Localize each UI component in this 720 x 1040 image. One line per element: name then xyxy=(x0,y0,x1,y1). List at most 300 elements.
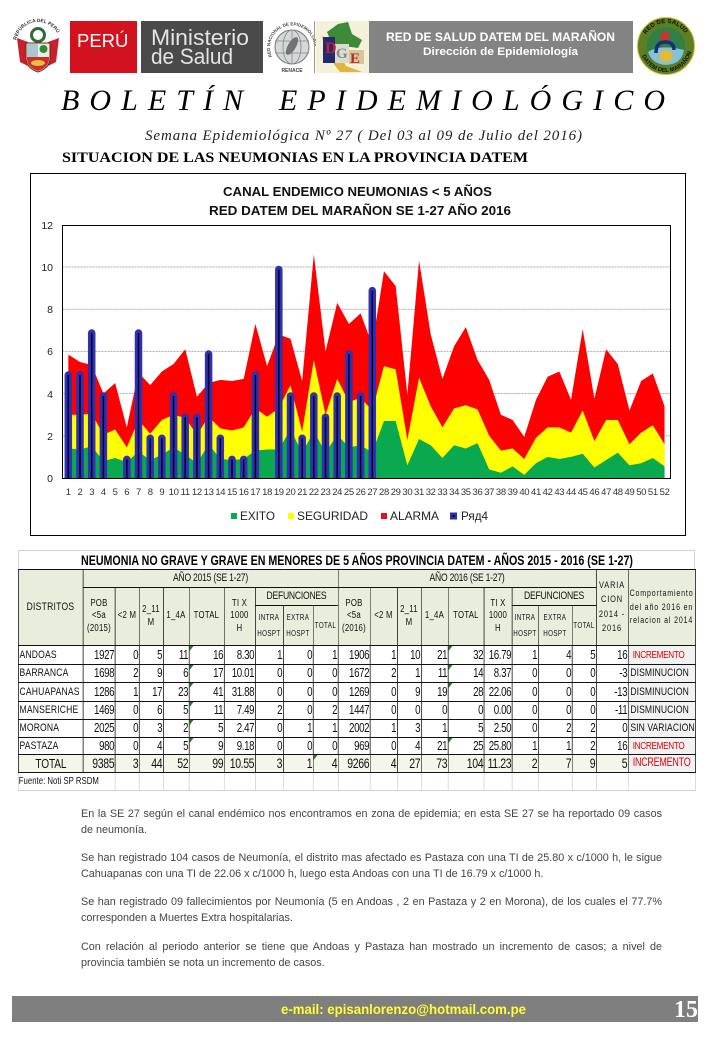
logo: Ministerio de Salud block: Ministerio xyxy=(151,25,249,50)
row: Pastaza: 25.80 xyxy=(489,739,511,753)
table header: years: del año 2016 en xyxy=(630,602,693,612)
area: SEGURIDAD xyxy=(68,360,665,478)
row: Andoas: 32 xyxy=(473,648,483,662)
row: province total: 9385 xyxy=(92,756,114,771)
row: Morona: 2 xyxy=(566,721,571,735)
table header: years: <5a xyxy=(347,610,361,621)
y axis labels xyxy=(41,220,53,485)
row: Cahuapanas: 1286 xyxy=(94,685,114,699)
table header: years: AÑO 2016 (SE 1-27) xyxy=(430,572,504,584)
x axis week labels: 12 xyxy=(192,487,202,498)
row: province total: 99 xyxy=(212,756,223,771)
row: Cahuapanas: 19 xyxy=(437,685,447,699)
row: Manseriche: 1469 xyxy=(94,703,114,717)
table header: years: M xyxy=(148,616,154,628)
area: ALARMA xyxy=(68,254,665,478)
x axis week labels: 1 xyxy=(66,487,71,498)
x axis week labels: 52 xyxy=(660,487,670,498)
row: Andoas: 5 xyxy=(590,648,595,662)
table header: years: VARIA xyxy=(599,580,625,591)
header banner: network name xyxy=(369,21,633,73)
header banner: network name: RED DE SALUD DATEM DEL MARAÑON xyxy=(386,31,615,44)
x axis week labels: 49 xyxy=(625,487,634,498)
table header: years: 2_11 xyxy=(400,604,418,615)
table header: death sub-columns: TOTAL xyxy=(315,621,336,630)
row: Pastaza: 0 xyxy=(307,739,312,753)
row: Barranca: 2 xyxy=(391,666,396,680)
x axis week labels: 25 xyxy=(344,487,354,498)
table header: death sub-columns: EXTRA xyxy=(544,613,566,622)
x axis week labels: 9 xyxy=(159,487,164,498)
row: Morona: 0 xyxy=(622,721,627,735)
row: province total: 9 xyxy=(590,756,595,771)
text block: paragraph 1: de neumonía. xyxy=(81,824,147,836)
text block: paragraph 3: corresponden a Muertes Extra hospitalarias. xyxy=(81,912,293,924)
row: Manseriche: 2 xyxy=(277,703,282,717)
row: province total: TOTAL xyxy=(35,756,66,771)
title: Boletín Epidemiológico xyxy=(61,85,665,166)
row: Andoas: 0 xyxy=(307,648,312,662)
row: Morona: 1 xyxy=(307,721,312,735)
row: Morona: 2.50 xyxy=(494,721,511,735)
row: Pastaza: 980 xyxy=(99,739,114,753)
x axis week labels: 33 xyxy=(437,487,447,498)
row: Morona: 2.47 xyxy=(237,721,254,735)
row: Manseriche: 0 xyxy=(442,703,447,717)
row: province total: 4 xyxy=(391,756,396,771)
row: province total xyxy=(19,755,695,772)
table header: age groups and deaths xyxy=(84,588,596,645)
panel: endemic channel chart xyxy=(30,173,686,536)
logo: DGE map xyxy=(316,21,369,73)
page number: 15 xyxy=(674,997,698,1023)
table header: years: 1000 xyxy=(489,610,507,621)
table header: death sub-columns: INTRA xyxy=(515,613,535,622)
table header: years: 2016 xyxy=(602,623,622,634)
row: Morona: 1 xyxy=(332,721,337,735)
legend xyxy=(231,509,488,523)
row: Barranca: 0 xyxy=(307,666,312,680)
row: Cahuapanas: 0 xyxy=(332,685,337,699)
x axis week labels: 14 xyxy=(215,487,225,498)
row: Pastaza: 1 xyxy=(566,739,571,753)
text block: paragraph 1 xyxy=(81,808,662,836)
section heading: SITUACION DE LAS NEUMONIAS EN LA PROVINCIA DATEM xyxy=(62,150,528,166)
row: Morona: 0 xyxy=(277,721,282,735)
chart title: CANAL ENDEMICO NEUMONIAS < 5 AÑOS xyxy=(223,184,492,199)
row: Manseriche: 7.49 xyxy=(237,703,254,717)
row: Andoas: 16 xyxy=(617,648,627,662)
table header: death sub-columns: HOSPT xyxy=(543,628,567,638)
x axis week labels: 8 xyxy=(148,487,153,498)
x axis week labels: 41 xyxy=(531,487,541,498)
table header: years: CION xyxy=(601,594,623,605)
logo: Red Datem badge xyxy=(637,17,695,75)
row: Barranca: DISMINUCION xyxy=(630,667,689,679)
x axis week labels: 44 xyxy=(566,487,576,498)
x axis week labels: 7 xyxy=(136,487,141,498)
row: province total: INCREMENTO xyxy=(633,757,690,769)
table header: death sub-columns: INTRA xyxy=(259,613,279,622)
row: Pastaza: 5 xyxy=(183,739,188,753)
row: Morona: MORONA xyxy=(20,722,59,734)
y axis labels: 8 xyxy=(47,304,53,316)
row: Andoas: 5 xyxy=(157,648,162,662)
x axis week labels: 26 xyxy=(356,487,366,498)
row: Barranca: 2 xyxy=(133,666,138,680)
row: Cahuapanas: 1 xyxy=(133,685,138,699)
x axis week labels: 34 xyxy=(449,487,459,498)
logo: Perú red block xyxy=(70,21,137,73)
table header: years: Comportamiento xyxy=(630,588,694,598)
x axis week labels: 18 xyxy=(262,487,272,498)
table header: years: <2 M xyxy=(118,610,136,621)
row: Andoas: 10 xyxy=(410,648,420,662)
row: Pastaza: 0 xyxy=(133,739,138,753)
x axis week labels: 31 xyxy=(414,487,424,498)
x axis week labels: 50 xyxy=(636,487,646,498)
row: province total: 1 xyxy=(307,756,312,771)
row: province total: 11.23 xyxy=(488,756,511,771)
row: Manseriche: 0 xyxy=(590,703,595,717)
row: Cahuapanas: 0 xyxy=(391,685,396,699)
row: Morona: 5 xyxy=(218,721,223,735)
row: Cahuapanas: 41 xyxy=(213,685,223,699)
row: Barranca: 1698 xyxy=(94,666,114,680)
row: Andoas: ANDOAS xyxy=(20,648,57,660)
y axis labels: 10 xyxy=(41,262,53,274)
x axis week labels: 22 xyxy=(309,487,319,498)
row: Cahuapanas: 23 xyxy=(178,685,188,699)
logo: Red Datem badge: RED DE SALUD xyxy=(642,18,688,34)
table header: age groups and deaths: POB xyxy=(90,598,108,609)
x axis week labels: 40 xyxy=(519,487,529,498)
table header: years: 1_4A xyxy=(425,610,444,621)
table header: death sub-columns: HOSPT xyxy=(286,628,310,638)
x axis week labels: 51 xyxy=(648,487,658,498)
row: Pastaza: 21 xyxy=(437,739,447,753)
row: Andoas: 1927 xyxy=(94,648,114,662)
row: Barranca: -3 xyxy=(619,666,627,680)
row: Barranca: 1672 xyxy=(349,666,369,680)
row: Andoas: 1 xyxy=(277,648,282,662)
table header: years: AÑO 2015 (SE 1-27) xyxy=(173,572,248,584)
row: Manseriche: MANSERICHE xyxy=(20,704,78,716)
x axis week labels: 28 xyxy=(379,487,389,498)
y axis labels: 12 xyxy=(41,220,53,232)
legend: SEGURIDAD xyxy=(297,509,368,523)
text block: paragraph 1: En la SE 27 según el canal endémico nos encontramos en zona de epidemia; en esta SE 27 se ha reportado 09 casos xyxy=(81,808,662,820)
row: province total: 10.55 xyxy=(230,756,254,771)
text block: paragraph 4 xyxy=(81,941,662,969)
row: Pastaza: 0 xyxy=(277,739,282,753)
area series: endemic channel zones xyxy=(68,254,665,478)
x axis week labels: 35 xyxy=(461,487,471,498)
row: Morona: 0 xyxy=(532,721,537,735)
table header: years: <2 M xyxy=(374,610,393,621)
logo: Ministerio de Salud block xyxy=(141,21,263,73)
row: Andoas: 16.79 xyxy=(489,648,511,662)
row: Manseriche: 6 xyxy=(157,703,162,717)
area: EXITO xyxy=(68,421,665,478)
row: Cahuapanas: DISMINUCION xyxy=(630,686,689,698)
row: Morona: 2 xyxy=(590,721,595,735)
row: Pastaza: INCREMENTO xyxy=(633,740,684,752)
table header: years: 1000 xyxy=(230,610,249,621)
row: source note: Fuente: Noti SP RSDM xyxy=(19,776,99,786)
x axis week labels: 29 xyxy=(391,487,401,498)
row: Andoas: 1 xyxy=(532,648,537,662)
row: Manseriche: 0 xyxy=(391,703,396,717)
table header: years: relacion al 2014 xyxy=(630,615,693,625)
row: Cahuapanas: -13 xyxy=(614,685,627,699)
row: Morona: 5 xyxy=(478,721,483,735)
table header: years: H xyxy=(495,623,501,634)
subtitle: epidemiological week: Semana Epidemiológica Nº 27 ( Del 03 al 09 de Julio del 2016) xyxy=(145,128,582,144)
row: Morona: 2 xyxy=(183,721,188,735)
table header: years: 2_11 xyxy=(142,604,160,615)
x axis week labels: 15 xyxy=(227,487,237,498)
x axis week labels: 42 xyxy=(543,487,553,498)
table header: years: TOTAL xyxy=(194,610,219,621)
table header: death sub-columns: HOSPT xyxy=(513,628,537,638)
row: Andoas: 1 xyxy=(332,648,337,662)
y axis labels: 6 xyxy=(47,346,53,358)
row: Manseriche: -11 xyxy=(615,703,627,717)
row: Andoas: 21 xyxy=(437,648,447,662)
row: province total: 27 xyxy=(409,756,420,771)
table header: death sub-columns: EXTRA xyxy=(287,613,309,622)
x axis week labels: 21 xyxy=(297,487,307,498)
x axis week labels: 27 xyxy=(367,487,377,498)
table header: years: TOTAL xyxy=(453,610,479,621)
row: Cahuapanas: 0 xyxy=(532,685,537,699)
row: Cahuapanas: 0 xyxy=(277,685,282,699)
table header: years: M xyxy=(406,616,412,628)
table header: years xyxy=(19,570,695,786)
logo: national coat of arms xyxy=(13,18,60,72)
y axis labels: 2 xyxy=(47,431,53,443)
x axis week labels xyxy=(66,487,670,498)
y axis labels: 0 xyxy=(47,473,53,485)
row: Andoas: 4 xyxy=(566,648,571,662)
row: province total: 52 xyxy=(177,756,188,771)
table header: death sub-columns: HOSPT xyxy=(257,628,281,638)
table: pneumonia cases by district xyxy=(18,569,696,791)
row: Barranca: 11 xyxy=(438,666,447,680)
row: Andoas: 1906 xyxy=(349,648,369,662)
table header: age groups and deaths: DEFUNCIONES xyxy=(267,590,326,602)
row: province total: 7 xyxy=(566,756,571,771)
row: Manseriche: 5 xyxy=(183,703,188,717)
row: Andoas: 0 xyxy=(133,648,138,662)
x axis week labels: 20 xyxy=(286,487,295,498)
table header: years: <5a xyxy=(92,610,106,621)
row: Cahuapanas: 0 xyxy=(590,685,595,699)
row: Barranca: 0 xyxy=(532,666,537,680)
row: Pastaza: 9 xyxy=(218,739,223,753)
text block: paragraph 4: provincia también se nota un incremento de casos. xyxy=(81,957,325,969)
logo: DGE map: G xyxy=(336,46,348,62)
logo: DGE map: D xyxy=(325,40,337,57)
x axis week labels: 16 xyxy=(239,487,249,498)
chart title xyxy=(209,184,511,218)
row: Pastaza: 0 xyxy=(332,739,337,753)
row: Andoas: 16 xyxy=(213,648,223,662)
table header: age groups and deaths: DEFUNCIONES xyxy=(524,590,584,602)
row: Manseriche: DISMINUCION xyxy=(630,704,689,716)
x axis week labels: 6 xyxy=(124,487,129,498)
row: Morona: 3 xyxy=(157,721,162,735)
row: Manseriche xyxy=(20,702,695,719)
row: Morona: 2025 xyxy=(94,721,114,735)
row: Cahuapanas: 9 xyxy=(415,685,420,699)
x axis week labels: 38 xyxy=(496,487,506,498)
row: Andoas: 8.30 xyxy=(237,648,254,662)
row: province total: 5 xyxy=(622,756,627,771)
row: Pastaza: 4 xyxy=(415,739,420,753)
x axis week labels: 43 xyxy=(554,487,564,498)
table header: death sub-columns: TOTAL xyxy=(573,621,595,630)
row: Cahuapanas: 0 xyxy=(566,685,571,699)
row: Manseriche: 0 xyxy=(532,703,537,717)
row: Manseriche: 2 xyxy=(332,703,337,717)
table header: years: 2014 - xyxy=(599,608,625,620)
bar series: Ряд4 weekly cases xyxy=(68,270,372,482)
row: Pastaza: 969 xyxy=(354,739,369,753)
text block: paragraph 3 xyxy=(81,896,662,924)
row: Cahuapanas: 22.06 xyxy=(489,685,511,699)
row: Barranca: BARRANCA xyxy=(20,667,68,679)
row: Andoas: INCREMENTO xyxy=(633,649,684,661)
row: Manseriche: 0 xyxy=(133,703,138,717)
row: Morona: 2002 xyxy=(349,721,369,735)
table header: years: H xyxy=(237,623,242,634)
logo: RENACE globe xyxy=(267,21,316,74)
text block: paragraph 2 xyxy=(81,852,662,880)
x axis week labels: 19 xyxy=(274,487,284,498)
row: Barranca: 1 xyxy=(415,666,420,680)
row: province total: 9266 xyxy=(347,756,369,771)
row: province total: 3 xyxy=(277,756,282,771)
row: Pastaza: 2 xyxy=(590,739,595,753)
row: Barranca: 0 xyxy=(590,666,595,680)
row: Manseriche: 0 xyxy=(307,703,312,717)
row: Morona xyxy=(20,720,695,737)
row: Morona: 0 xyxy=(133,721,138,735)
x axis week labels: 30 xyxy=(402,487,412,498)
row: Pastaza: 25 xyxy=(473,739,483,753)
logo: Perú red block: PERÚ xyxy=(77,30,128,51)
legend: Ряд4 xyxy=(461,509,488,523)
row: Barranca: 17 xyxy=(213,666,223,680)
row: Barranca: 0 xyxy=(566,666,571,680)
row: Manseriche: 1447 xyxy=(349,703,369,717)
row: Cahuapanas xyxy=(20,683,695,701)
row: Manseriche: 0.00 xyxy=(494,703,511,717)
row: Morona: 1 xyxy=(442,721,447,735)
row: province total: 104 xyxy=(467,756,483,771)
x axis week labels: 24 xyxy=(332,487,342,498)
x axis week labels: 23 xyxy=(321,487,330,498)
row: Barranca: 8.37 xyxy=(494,666,511,680)
row: Pastaza: 9.18 xyxy=(237,739,254,753)
x axis week labels: 10 xyxy=(169,487,179,498)
row: Andoas: 11 xyxy=(179,648,188,662)
row: Cahuapanas: 1269 xyxy=(349,685,369,699)
row: Cahuapanas: 17 xyxy=(152,685,162,699)
row: Pastaza: 16 xyxy=(617,739,627,753)
row: Barranca: 9 xyxy=(157,666,162,680)
logo: national coat of arms: REPÚBLICA DEL PERÚ xyxy=(13,18,60,40)
chart title: RED DATEM DEL MARAÑON SE 1-27 AÑO 2016 xyxy=(209,203,511,218)
row: Barranca: 6 xyxy=(183,666,188,680)
row: Manseriche: 0 xyxy=(415,703,420,717)
x axis week labels: 3 xyxy=(89,487,94,498)
x axis week labels: 47 xyxy=(601,487,611,498)
row: Barranca: 0 xyxy=(277,666,282,680)
x axis week labels: 36 xyxy=(473,487,482,498)
x axis week labels: 13 xyxy=(204,487,214,498)
header banner: network name: Dirección de Epidemiología xyxy=(423,46,579,58)
row: Andoas: 1 xyxy=(391,648,396,662)
logo: DGE map: E xyxy=(350,51,360,67)
table header: years: 1_4A xyxy=(166,610,186,621)
legend: ALARMA xyxy=(390,509,439,523)
row: Manseriche: 0 xyxy=(566,703,571,717)
row: Pastaza: 1 xyxy=(532,739,537,753)
footer email: e-mail: episanlorenzo@hotmail.com.pe xyxy=(281,1002,526,1017)
row: Barranca xyxy=(20,665,695,682)
x axis week labels: 45 xyxy=(578,487,588,498)
row: Manseriche: 11 xyxy=(214,703,223,717)
y axis labels: 4 xyxy=(47,389,53,401)
table header: years: (2015) xyxy=(87,623,111,634)
row: Pastaza xyxy=(20,738,695,754)
row: Pastaza: PASTAZA xyxy=(20,740,58,752)
row: Barranca: 10.01 xyxy=(232,666,254,680)
x axis week labels: 48 xyxy=(613,487,623,498)
text block: paragraph 2: Se han registrado 104 casos de Neumonía, el distrito mas afectado es Pastaza con una TI de 25.80 x c/1000 h, le sigue xyxy=(81,852,662,864)
logo: Ministerio de Salud block: de Salud xyxy=(151,44,233,69)
row: Manseriche: 0 xyxy=(478,703,483,717)
x axis week labels: 32 xyxy=(426,487,436,498)
table header: years: (2016) xyxy=(342,623,366,634)
row: Barranca: 0 xyxy=(332,666,337,680)
logo: Red Datem badge: DATEM DEL MARAÑON xyxy=(642,51,692,72)
table header: age groups and deaths: POB xyxy=(345,598,363,609)
text block: paragraph 2: Cahuapanas con una TI de 22.06 x c/1000 h, luego esta Andoas con una TI de 16.79 x c/1000 h. xyxy=(81,868,543,880)
footer bar xyxy=(12,996,698,1023)
row: Cahuapanas: CAHUAPANAS xyxy=(20,686,80,698)
logo: RENACE globe: RED NACIONAL DE EPIDEMIOLOGIA xyxy=(267,22,316,58)
row: Morona: 1 xyxy=(391,721,396,735)
header band with logos xyxy=(13,17,695,75)
row: Barranca: 14 xyxy=(473,666,483,680)
x axis week labels: 37 xyxy=(484,487,494,498)
x axis week labels: 17 xyxy=(250,487,260,498)
row: province total: 4 xyxy=(332,756,337,771)
row: Morona: 3 xyxy=(415,721,420,735)
table header: age groups and deaths: TI X xyxy=(232,598,247,609)
row: Morona: SIN VARIACION xyxy=(630,722,695,734)
row: Cahuapanas: 31.88 xyxy=(232,685,254,699)
row: province total: 2 xyxy=(532,756,537,771)
text block: paragraph 4: Con relación al periodo anterior se tiene que Andoas y Pastaza han mostrado un incremento de casos; a nivel de xyxy=(81,941,662,953)
legend: EXITO xyxy=(240,509,275,523)
x axis week labels: 4 xyxy=(101,487,106,498)
row: Cahuapanas: 28 xyxy=(473,685,483,699)
